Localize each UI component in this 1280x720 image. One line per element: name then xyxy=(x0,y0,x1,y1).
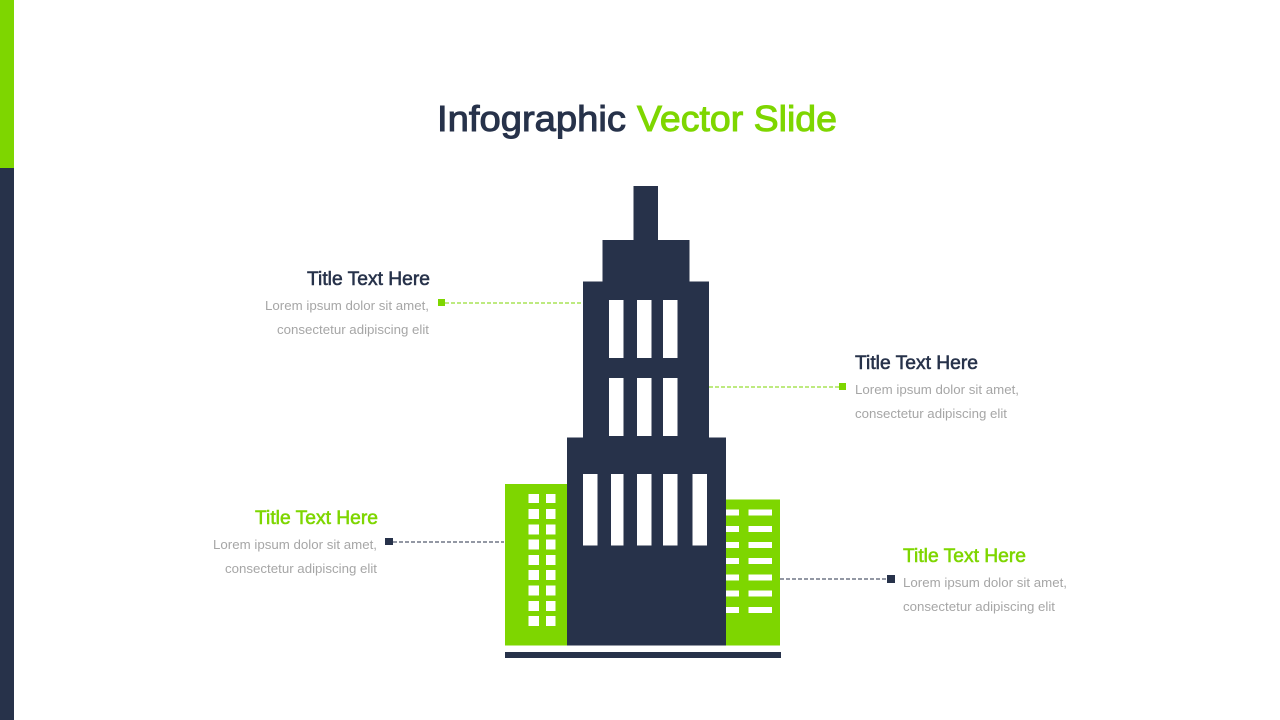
central dark tower xyxy=(567,186,726,646)
callout: bottom right: consectetur adipiscing elit xyxy=(903,599,1055,614)
callout: top left: consectetur adipiscing elit xyxy=(277,322,429,337)
callout: bottom left: Title Text Here xyxy=(255,508,378,529)
left green building xyxy=(505,484,567,646)
callout: top right xyxy=(709,353,1019,421)
callout: top left: Lorem ipsum dolor sit amet, xyxy=(265,298,429,313)
building illustration xyxy=(505,186,781,658)
callout: top right: consectetur adipiscing elit xyxy=(855,406,1007,421)
callout: bottom right: Title Text Here xyxy=(903,546,1026,567)
callout: bottom left: Lorem ipsum dolor sit amet, xyxy=(213,537,377,552)
callout: top left: Title Text Here xyxy=(307,269,430,290)
callout: bottom right xyxy=(780,546,1067,614)
callout: bottom left xyxy=(213,508,504,576)
title: Vector Slide xyxy=(637,98,837,139)
title: Infographic xyxy=(437,98,626,139)
callout: top left xyxy=(265,269,581,337)
title xyxy=(437,98,837,139)
right green building xyxy=(726,500,780,646)
callout: bottom right: Lorem ipsum dolor sit amet, xyxy=(903,575,1067,590)
left accent bar xyxy=(0,0,14,720)
callout: top right: Lorem ipsum dolor sit amet, xyxy=(855,382,1019,397)
callout: top right: Title Text Here xyxy=(855,353,978,374)
callout: bottom left: consectetur adipiscing elit xyxy=(225,561,377,576)
ground line xyxy=(505,652,781,658)
